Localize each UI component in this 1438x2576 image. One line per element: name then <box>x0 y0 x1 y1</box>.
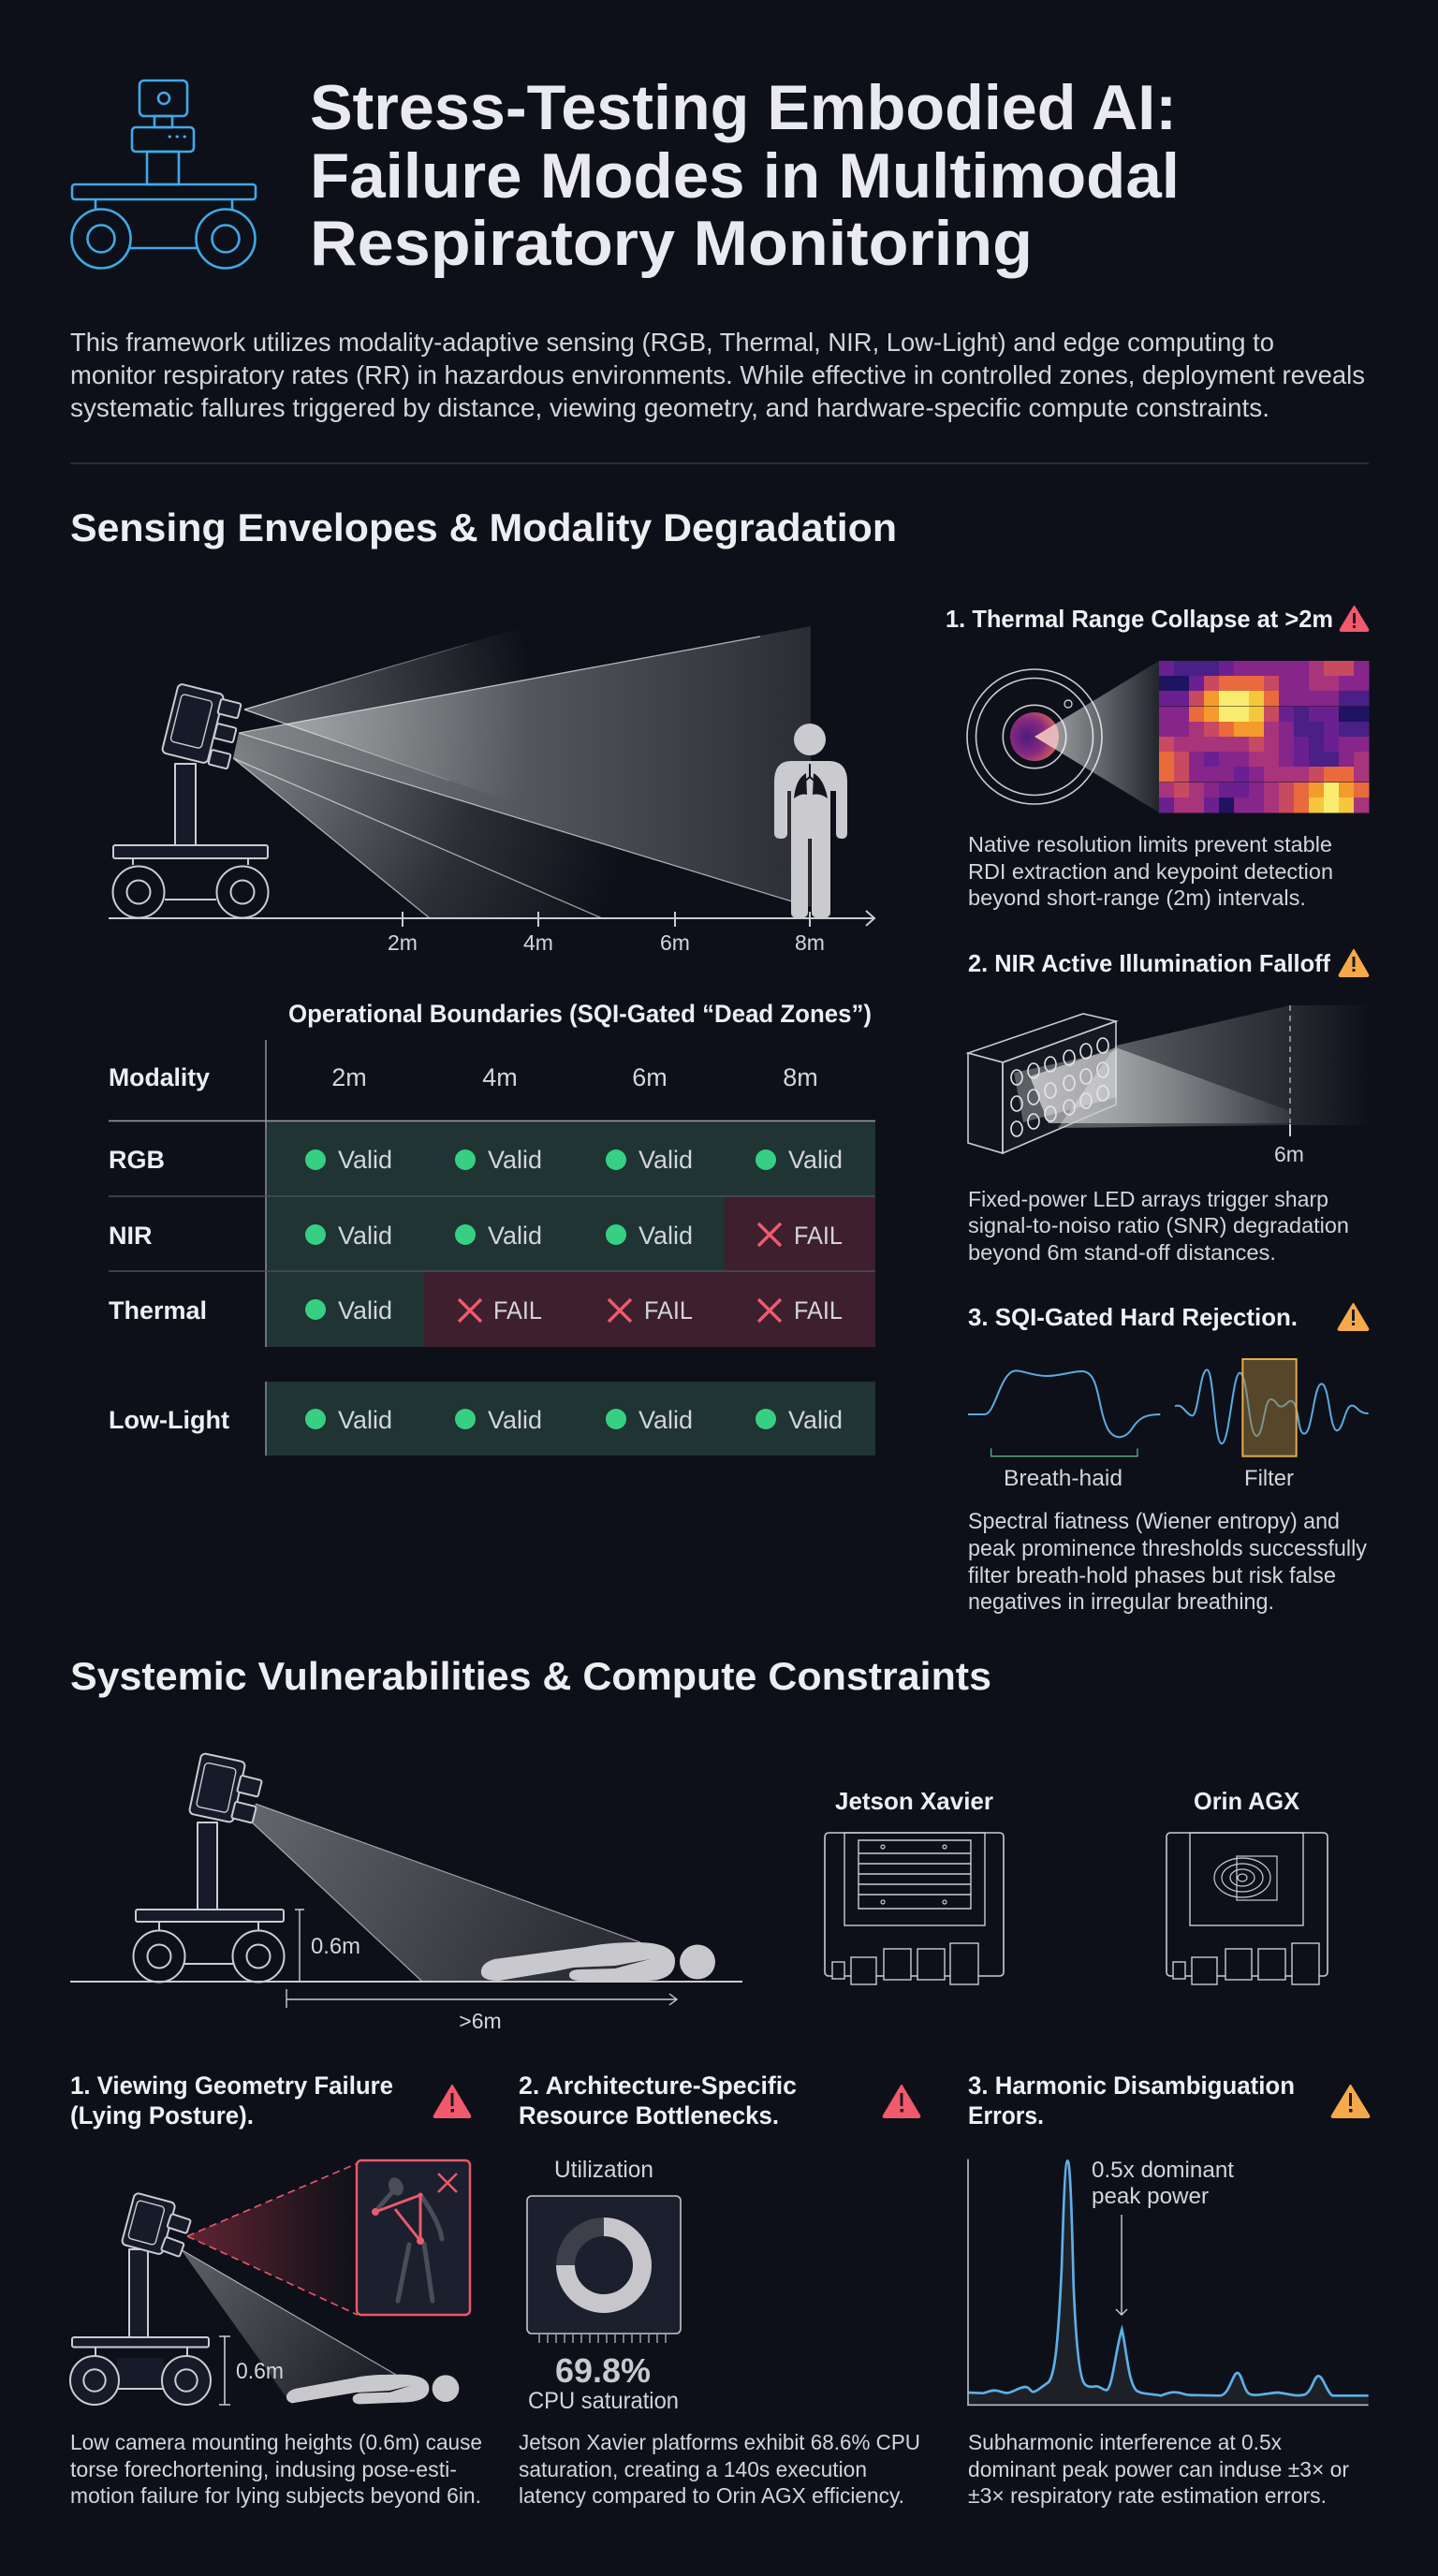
SQI description <box>968 1509 1367 1615</box>
panel: NIR illumination falloff <box>968 949 1372 1265</box>
heading with warning icon <box>70 2071 470 2130</box>
sensing envelope diagram <box>109 626 874 955</box>
title <box>310 72 1180 279</box>
title: Respiratory Monitoring <box>310 208 1033 279</box>
ground line and dimensions: >6m <box>459 2009 502 2033</box>
waveform labels <box>1004 1466 1294 1491</box>
CPU saturation value: CPU saturation <box>528 2388 679 2414</box>
title: Stress-Testing Embodied AI: <box>310 72 1177 143</box>
row: NIR: NIR <box>109 1222 152 1250</box>
NIR description <box>968 1187 1349 1265</box>
NIR description: signal-to-noiso ratio (SNR) degradation <box>968 1213 1349 1237</box>
row: NIR: Valid <box>638 1222 693 1250</box>
modality table <box>109 1040 875 1456</box>
board: Jetson Xavier: Jetson Xavier <box>835 1787 993 1815</box>
harmonic description: dominant peak power can induse ±3× or <box>968 2457 1349 2481</box>
SQI description: Spectral fiatness (Wiener entropy) and <box>968 1509 1340 1534</box>
NIR description: beyond 6m stand-off distances. <box>968 1240 1276 1265</box>
heading with warning icon: 3. SQI-Gated Hard Rejection. <box>968 1303 1298 1331</box>
viewing geometry description: torse forechortening, indusing pose-esti- <box>70 2457 457 2481</box>
row: RGB: Valid <box>488 1146 542 1174</box>
intro paragraph: This framework utilizes modality-adaptive sensing (RGB, Thermal, NIR, Low-Light) and edge computing to <box>70 328 1274 357</box>
row: Thermal: Thermal <box>109 1296 207 1325</box>
spectrum chart <box>968 2159 1369 2405</box>
row: Low-Light <box>109 1406 843 1434</box>
heading with warning icon: Resource Bottlenecks. <box>519 2101 779 2130</box>
row: Thermal: FAIL <box>644 1296 693 1325</box>
waveforms <box>968 1359 1369 1456</box>
header row: 2m <box>331 1063 367 1091</box>
board: Orin AGX <box>1167 1787 1328 1984</box>
peak annotation: peak power <box>1092 2184 1209 2209</box>
NIR description: Fixed-power LED arrays trigger sharp <box>968 1187 1328 1211</box>
LED array and beam <box>968 1005 1372 1166</box>
low resolution thermal heatmap <box>1159 661 1369 812</box>
heading with warning icon <box>519 2071 919 2130</box>
row: NIR <box>109 1222 843 1250</box>
architecture description: latency compared to Orin AGX efficiency. <box>519 2483 904 2508</box>
harmonic description: Subharmonic interference at 0.5x <box>968 2430 1282 2454</box>
heading with warning icon <box>968 2071 1369 2130</box>
LED array and beam: 6m <box>1274 1142 1304 1166</box>
sensor beams <box>233 626 811 918</box>
grey camera beam <box>181 2249 396 2396</box>
row: Thermal: Valid <box>338 1296 392 1325</box>
heading with warning icon: 2. Architecture-Specific <box>519 2071 797 2100</box>
SQI description: negatives in irregular breathing. <box>968 1589 1274 1615</box>
chip with donut chart <box>527 2196 681 2343</box>
row: Thermal <box>109 1296 843 1325</box>
robot <box>133 1753 285 1983</box>
0.6m dimension <box>219 2336 284 2405</box>
board: Jetson Xavier <box>825 1787 1004 1984</box>
row: NIR: Valid <box>488 1222 542 1250</box>
lying posture scene <box>70 1753 742 2033</box>
viewing geometry description: Low camera mounting heights (0.6m) cause <box>70 2430 482 2454</box>
header row: 6m <box>632 1063 668 1091</box>
SQI description: peak prominence thresholds successfully <box>968 1536 1367 1561</box>
row: NIR: FAIL <box>794 1222 843 1250</box>
panel: harmonic disambiguation <box>968 2071 1369 2508</box>
header row <box>109 1063 818 1091</box>
header row: 4m <box>482 1063 518 1091</box>
CPU saturation value <box>528 2351 679 2414</box>
pose estimation inset <box>357 2160 470 2315</box>
intro paragraph: systematic fallures triggered by distance, viewing geometry, and hardware-specific compute constraints. <box>70 393 1269 422</box>
waveform labels: Filter <box>1244 1466 1294 1491</box>
thermal description: Native resolution limits prevent stable <box>968 832 1332 856</box>
panel: thermal range collapse <box>946 605 1369 910</box>
header row: Modality <box>109 1063 210 1091</box>
row: RGB: Valid <box>338 1146 392 1174</box>
lying person <box>286 2375 459 2404</box>
board: Orin AGX: Orin AGX <box>1194 1787 1300 1815</box>
row: RGB: Valid <box>638 1146 693 1174</box>
thermal camera lens <box>967 661 1159 812</box>
utilization label: Utilization <box>554 2157 653 2183</box>
icon: blue robot <box>71 80 256 268</box>
panel: SQI-gated hard rejection <box>968 1303 1369 1615</box>
heading with warning icon: 3. Harmonic Disambiguation <box>968 2071 1295 2100</box>
waveform labels: Breath-haid <box>1004 1466 1123 1491</box>
row: Low-Light: Valid <box>788 1406 843 1434</box>
CPU saturation value: 69.8% <box>555 2351 651 2390</box>
row: Thermal: FAIL <box>794 1296 843 1325</box>
red failure cone <box>187 2163 358 2315</box>
harmonic description <box>968 2430 1349 2508</box>
architecture description <box>519 2430 920 2508</box>
heading with warning icon: 1. Thermal Range Collapse at >2m <box>946 605 1333 633</box>
camera beam <box>250 1804 658 1981</box>
small robot <box>70 2192 211 2405</box>
heading with warning icon: Errors. <box>968 2101 1044 2130</box>
thermal description <box>968 832 1333 910</box>
heading: systemic vulnerabilities: Systemic Vulnerabilities & Compute Constraints <box>70 1654 991 1698</box>
header row: 8m <box>783 1063 818 1091</box>
row: Low-Light: Valid <box>638 1406 693 1434</box>
thermal description: beyond short-range (2m) intervals. <box>968 886 1306 910</box>
harmonic description: ±3× respiratory rate estimation errors. <box>968 2483 1327 2508</box>
row: Low-Light: Valid <box>488 1406 542 1434</box>
peak annotation <box>1092 2158 1234 2315</box>
row: RGB: RGB <box>109 1146 165 1174</box>
robot with multi-sensor head <box>112 683 268 917</box>
ground axis with distance ticks: 8m <box>795 930 825 955</box>
ground axis with distance ticks: 6m <box>660 930 690 955</box>
row: Thermal: FAIL <box>493 1296 542 1325</box>
cell backgrounds <box>266 1121 875 1456</box>
heading with warning icon: 1. Viewing Geometry Failure <box>70 2071 393 2100</box>
row: RGB: Valid <box>788 1146 843 1174</box>
ground line and dimensions: 0.6m <box>311 1934 360 1959</box>
row: Low-Light: Low-Light <box>109 1406 229 1434</box>
title: Failure Modes in Multimodal <box>310 140 1180 212</box>
heading with warning icon: 2. NIR Active Illumination Falloff <box>968 949 1330 977</box>
heading with warning icon: (Lying Posture). <box>70 2101 254 2130</box>
ground line and dimensions <box>70 1910 742 2033</box>
row: RGB <box>109 1146 843 1174</box>
SQI description: filter breath-hold phases but risk false <box>968 1563 1336 1588</box>
ground axis with distance ticks: 4m <box>523 930 553 955</box>
panel: viewing geometry failure <box>70 2071 482 2508</box>
row: Low-Light: Valid <box>338 1406 392 1434</box>
lying person <box>481 1942 715 1981</box>
heading: sensing envelopes: Sensing Envelopes & Modality Degradation <box>70 505 897 549</box>
standing person with lungs <box>774 724 847 918</box>
0.6m dimension: 0.6m <box>236 2359 284 2384</box>
architecture description: Jetson Xavier platforms exhibit 68.6% CPU <box>519 2430 920 2454</box>
architecture description: saturation, creating a 140s execution <box>519 2457 867 2481</box>
viewing geometry description: motion failure for lying subjects beyond 6in. <box>70 2483 481 2508</box>
panel: architecture bottlenecks <box>519 2071 920 2508</box>
intro paragraph <box>70 328 1365 422</box>
ground axis with distance ticks <box>109 911 874 955</box>
thermal description: RDI extraction and keypoint detection <box>968 859 1333 884</box>
peak annotation: 0.5x dominant <box>1092 2158 1234 2183</box>
table title: Operational Boundaries (SQI-Gated “Dead Zones”) <box>288 1000 872 1028</box>
viewing geometry description <box>70 2430 482 2508</box>
ground axis with distance ticks: 2m <box>388 930 418 955</box>
intro paragraph: monitor respiratory rates (RR) in hazardous environments. While effective in controlled zones, deployment reveals <box>70 360 1365 389</box>
row: NIR: Valid <box>338 1222 392 1250</box>
